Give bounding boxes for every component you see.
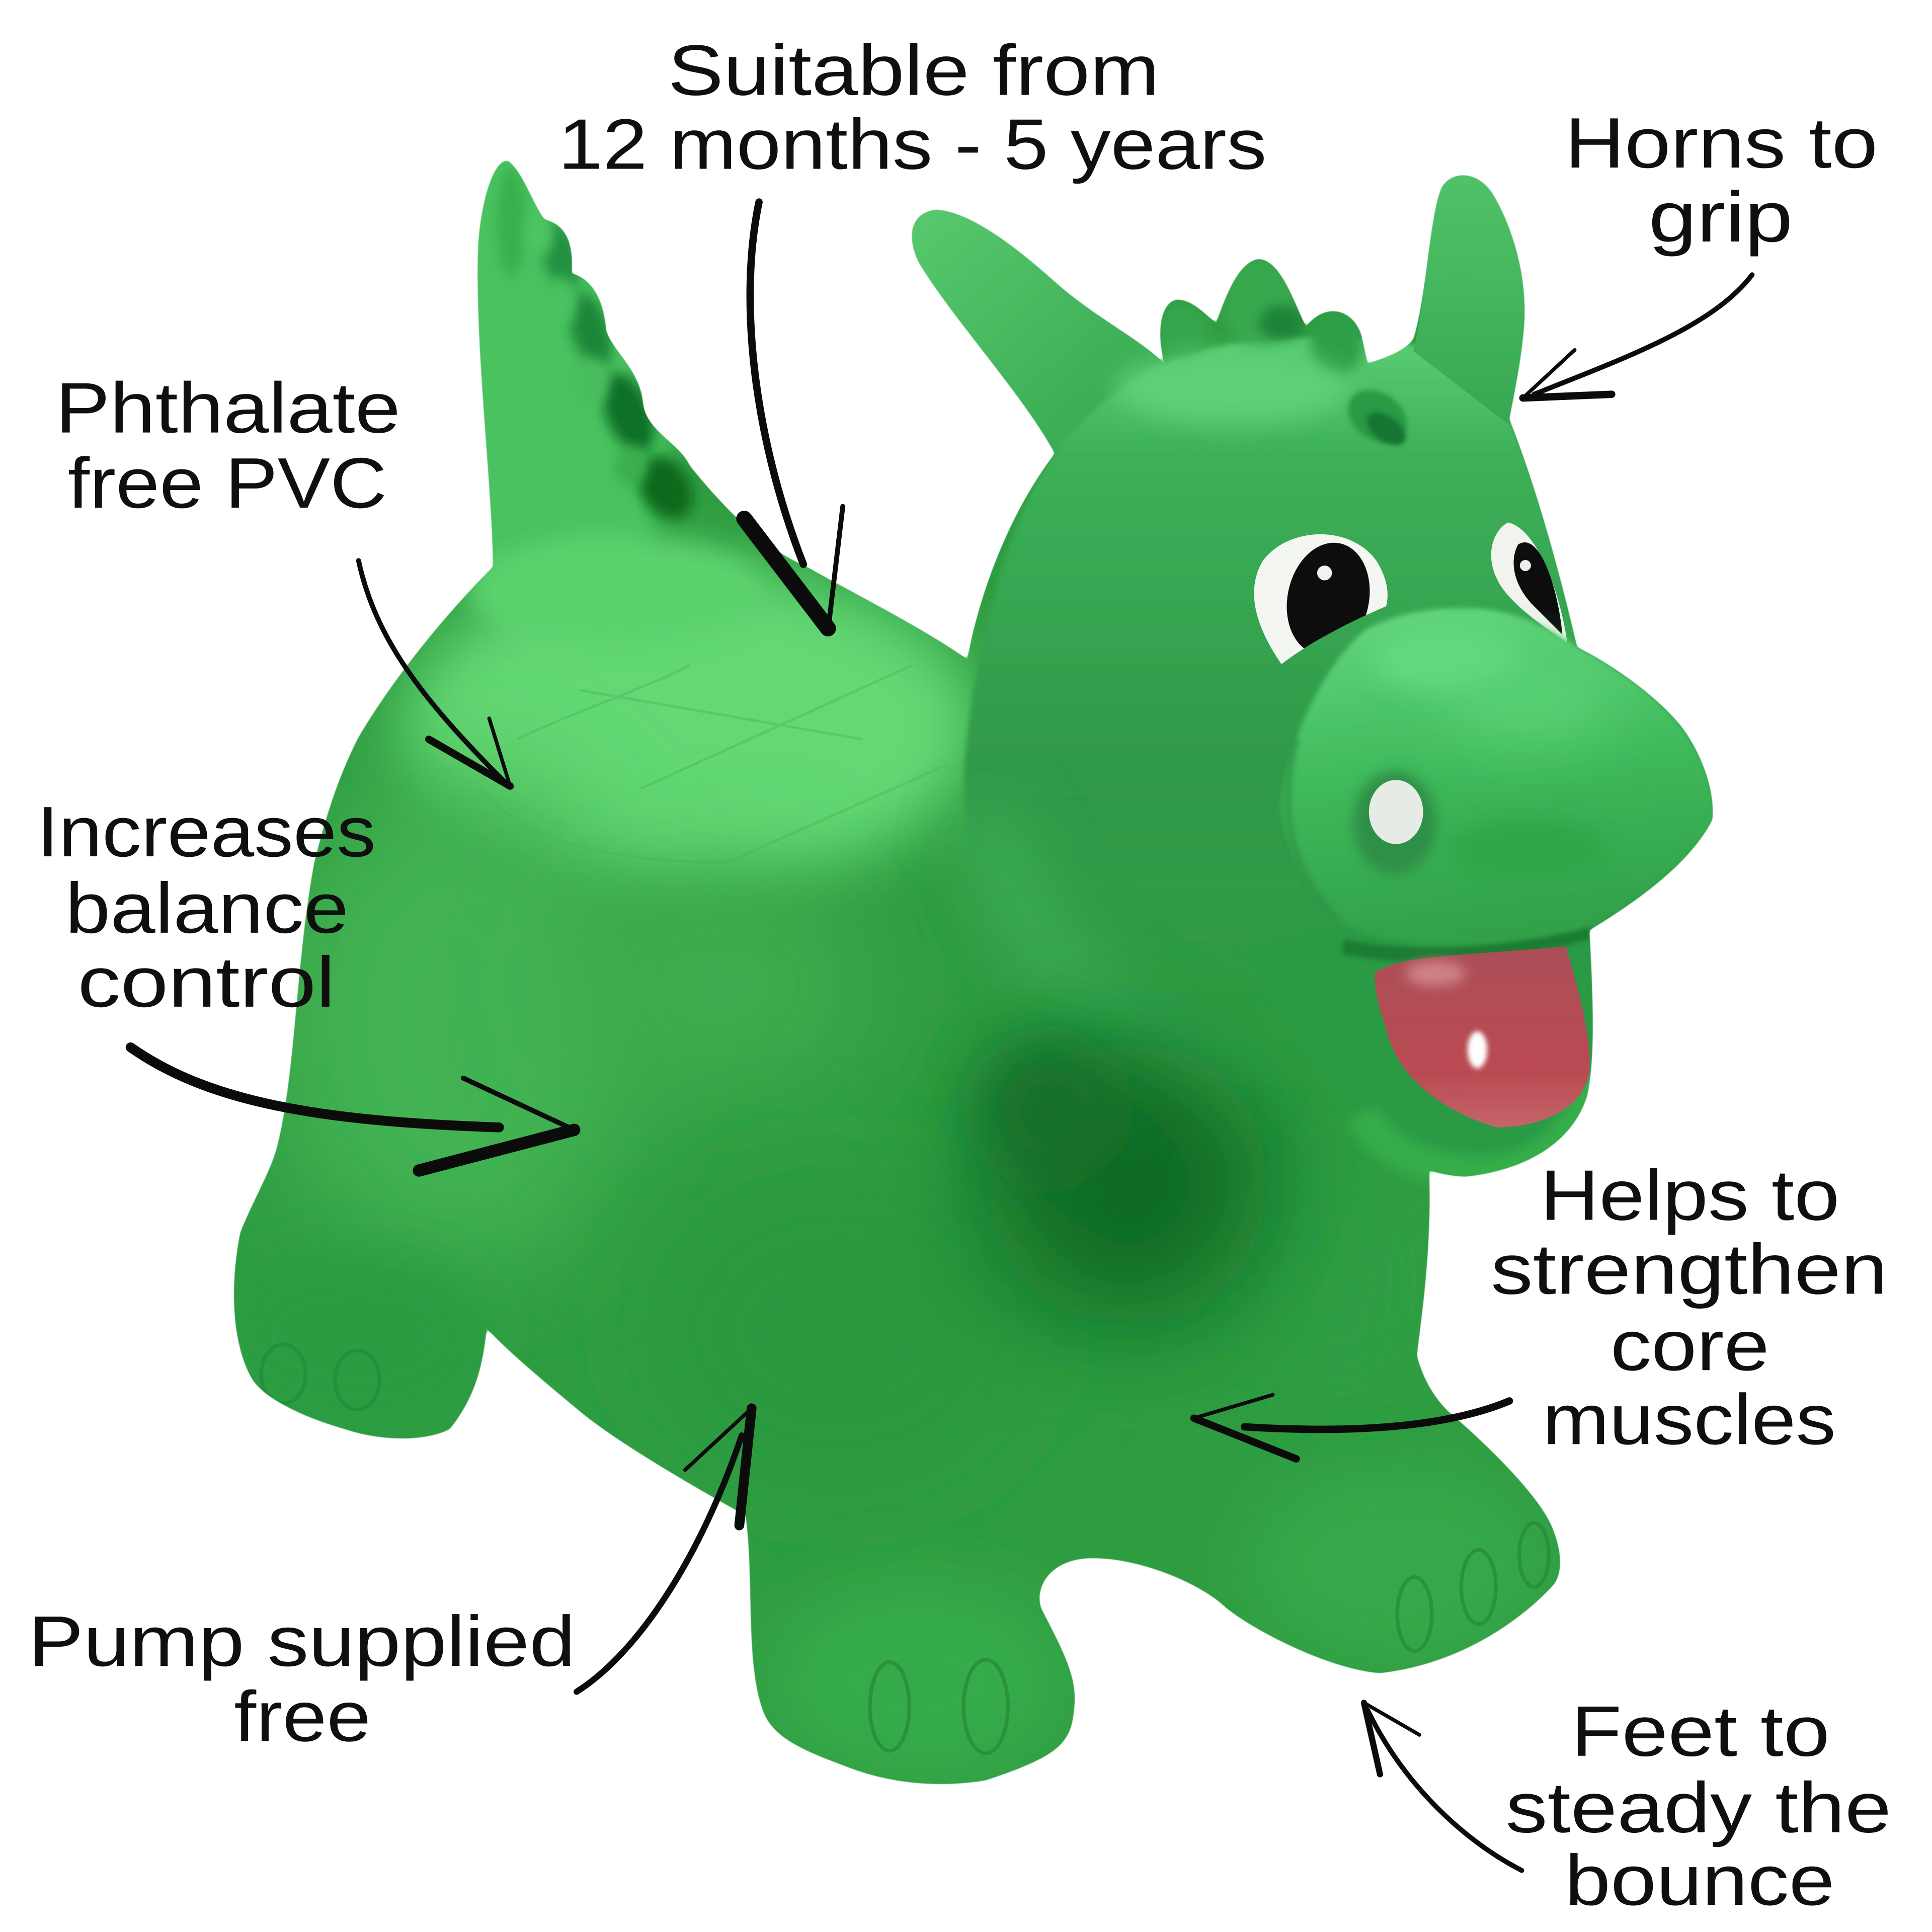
text: pump: free xyxy=(234,1676,371,1756)
feet xyxy=(222,1251,1549,1787)
text: suitable age: 12 months - 5 years xyxy=(558,105,1267,185)
text: feet: bounce xyxy=(1565,1840,1835,1920)
text: horns xyxy=(1565,103,1878,257)
snout xyxy=(1281,608,1715,945)
text: horns: Horns to xyxy=(1565,103,1878,183)
arrow: core muscles xyxy=(1194,1395,1509,1459)
text: suitable age xyxy=(558,31,1267,185)
text: phthalate free xyxy=(55,368,400,523)
jaw and mouth area xyxy=(1244,915,1602,1177)
tail xyxy=(431,99,704,640)
arrow: pump xyxy=(577,1408,752,1692)
text: phthalate free: free PVC xyxy=(68,443,387,523)
arrow: horns xyxy=(1523,275,1752,398)
text: core muscles: strengthen xyxy=(1491,1229,1888,1309)
neck light band xyxy=(986,813,1244,1084)
text: balance control: control xyxy=(77,942,335,1022)
text: balance control xyxy=(37,792,376,1022)
arrow: balance control xyxy=(131,1048,574,1171)
dragon hopper toy xyxy=(233,160,1714,1785)
text: core muscles xyxy=(1491,1155,1888,1460)
head xyxy=(963,337,1602,1171)
text: pump xyxy=(28,1601,576,1756)
body shading xyxy=(271,776,1417,1479)
text: core muscles: muscles xyxy=(1543,1380,1836,1460)
text: balance control: Increases xyxy=(37,792,376,872)
left eye xyxy=(1254,534,1388,664)
text: feet xyxy=(1506,1692,1891,1920)
right ear xyxy=(1413,175,1525,425)
back highlight xyxy=(400,536,980,887)
text: core muscles: core xyxy=(1611,1306,1769,1386)
text: pump: Pump supplied xyxy=(28,1601,576,1681)
nostril xyxy=(1369,780,1423,844)
right eye xyxy=(1491,522,1567,643)
text: feet: Feet to xyxy=(1571,1692,1830,1772)
left ear xyxy=(912,209,1171,453)
text: core muscles: Helps to xyxy=(1540,1155,1839,1235)
text: suitable age: Suitable from xyxy=(668,31,1159,111)
arrow: feet xyxy=(1364,1703,1521,1871)
arrow: phthalate free xyxy=(359,560,510,786)
text: horns: grip xyxy=(1649,177,1793,257)
tongue xyxy=(1375,946,1590,1128)
text: balance control: balance xyxy=(65,868,349,948)
head crest xyxy=(1115,258,1417,454)
text: phthalate free: Phthalate xyxy=(55,368,400,448)
arrow: suitable age xyxy=(744,202,843,631)
text: feet: steady the xyxy=(1506,1768,1891,1848)
chest shadow xyxy=(980,1041,1269,1325)
